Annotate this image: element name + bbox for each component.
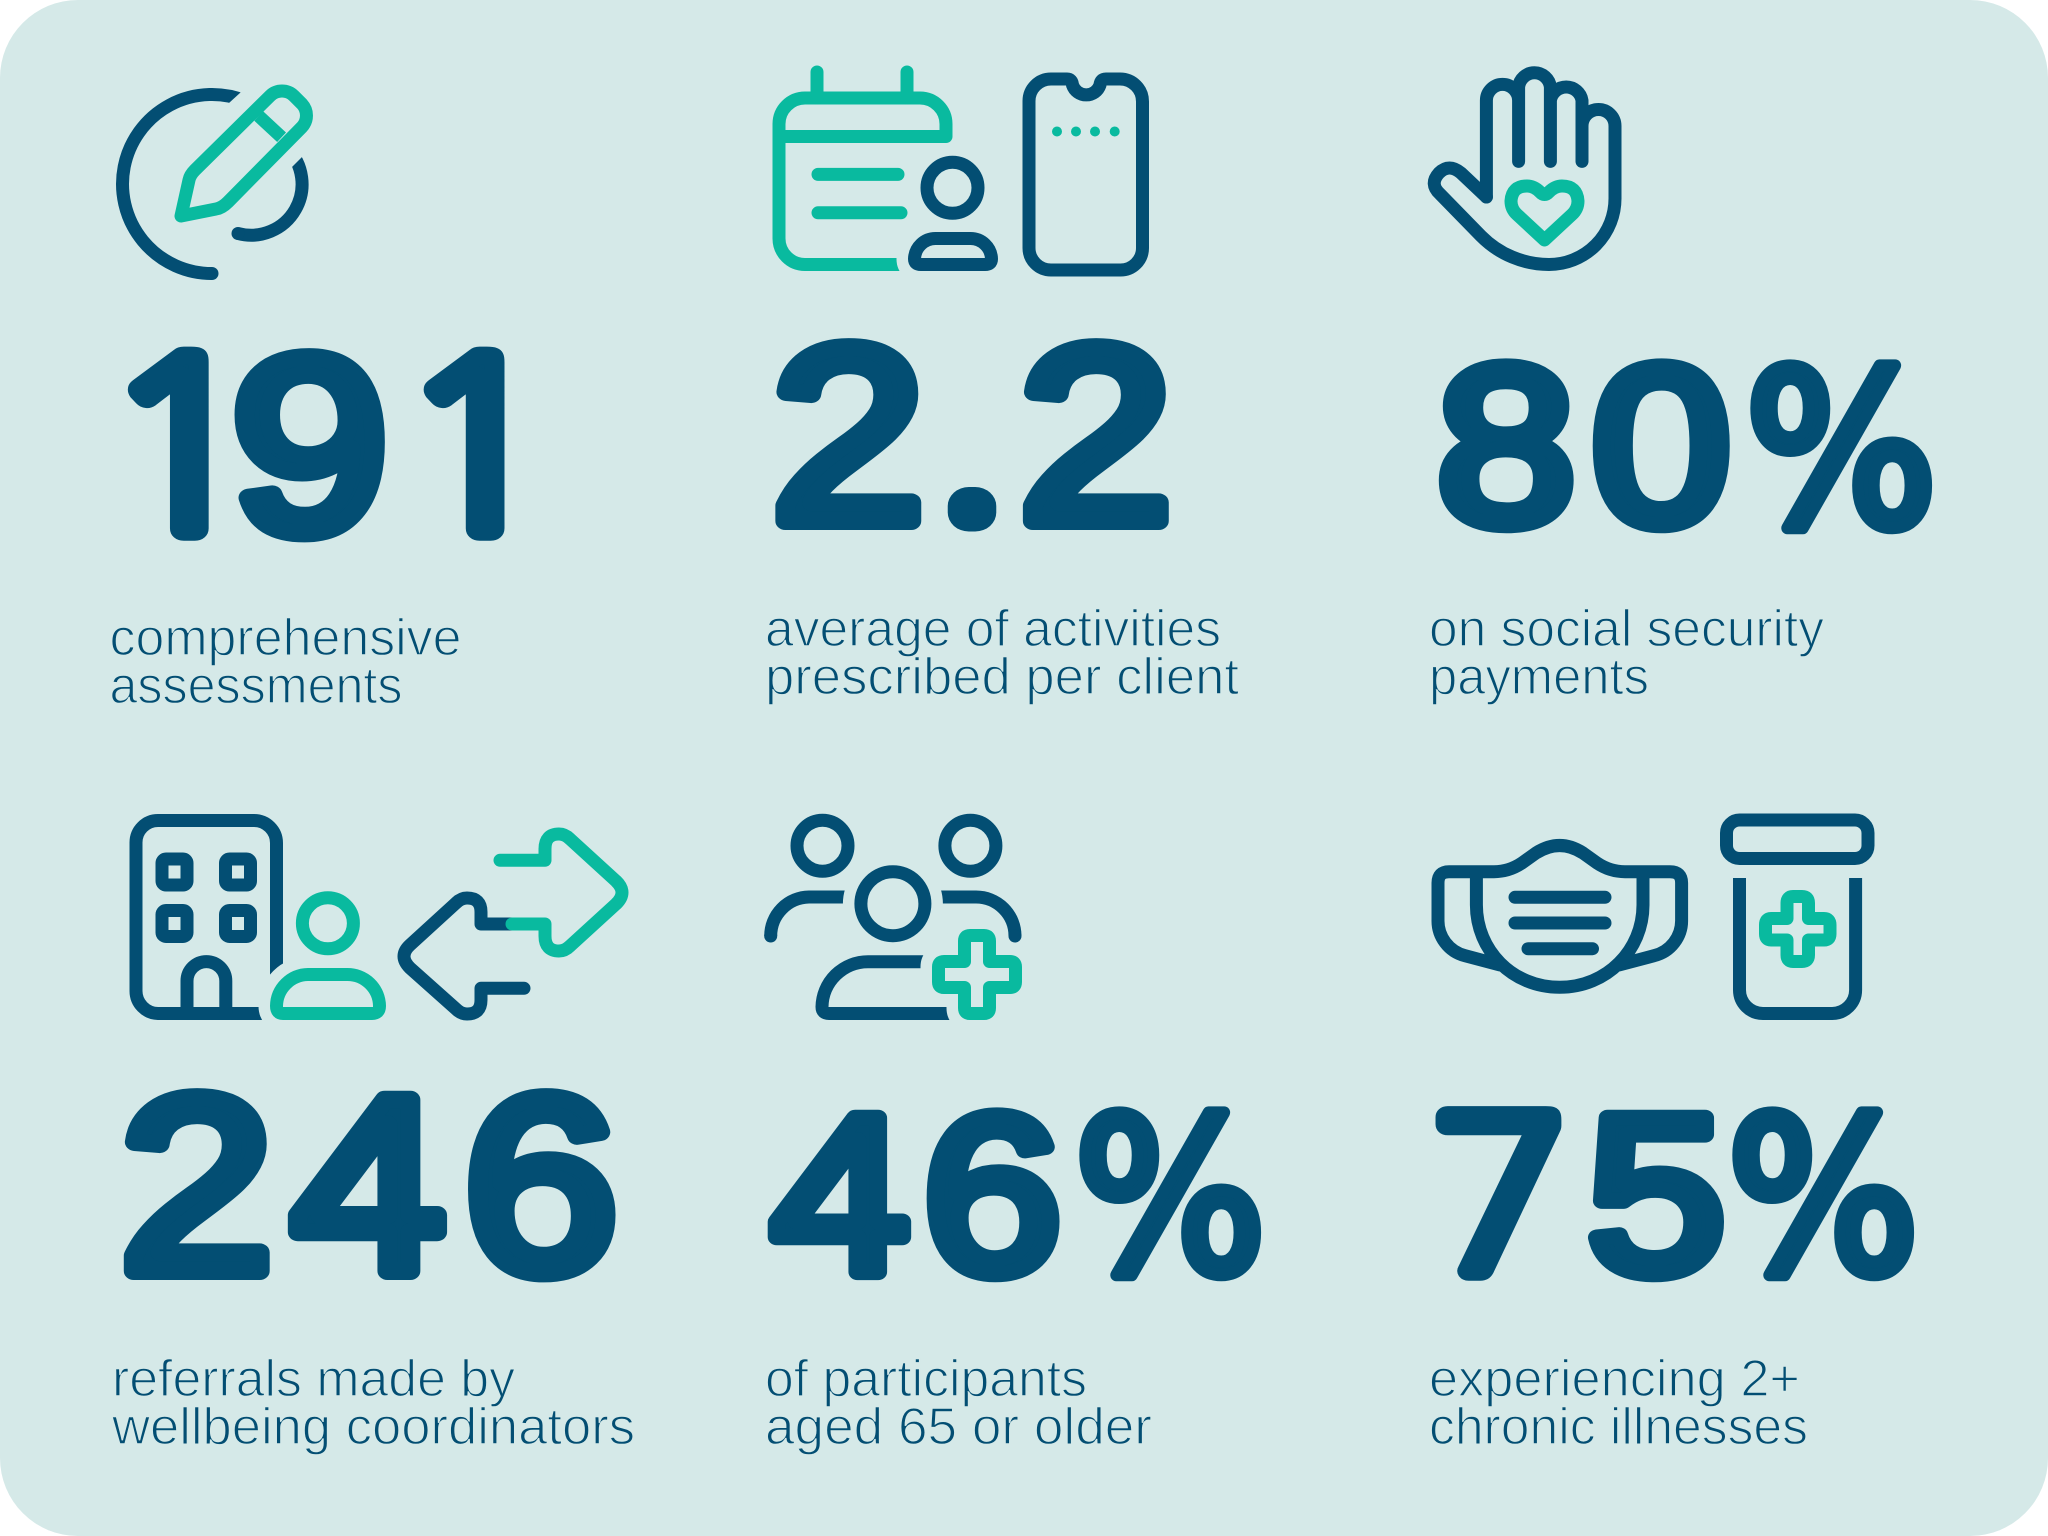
- stat: 191: 1: [396, 329, 558, 566]
- stat: 75%: 7: [1428, 1091, 1571, 1303]
- label: comprehensive assessments: assessments: [110, 657, 402, 715]
- label: comprehensive assessments: comprehensive: [110, 609, 462, 667]
- label: of participants aged 65 or older: aged 65 or older: [765, 1398, 1152, 1456]
- stat: 75%: 5: [1587, 1070, 1725, 1320]
- label: comprehensive assessments: [110, 609, 462, 715]
- stat: 46%: 46: [771, 1070, 1061, 1320]
- label: referrals made by wellbeing coordinators: wellbeing coordinators: [111, 1398, 635, 1456]
- icon: face mask and pill bottle: [1438, 820, 1868, 1014]
- icon: three people with medical cross: [764, 820, 1022, 1014]
- stat: 46%: %: [1074, 1073, 1266, 1323]
- stat: 2.2: 2: [1019, 296, 1173, 574]
- panel: participants aged 65 or older: [764, 820, 1266, 1456]
- label: on social security payments: on social security: [1429, 600, 1824, 658]
- panel: referrals: [111, 820, 635, 1456]
- label: referrals made by wellbeing coordinators: [111, 1350, 635, 1456]
- stat: 80%: [1437, 321, 1937, 576]
- label: average of activities prescribed per client: average of activities: [765, 600, 1221, 658]
- label: experiencing 2+ chronic illnesses: chronic illnesses: [1429, 1398, 1808, 1456]
- stat: 46%: [771, 1070, 1266, 1323]
- label: of participants aged 65 or older: of participants: [765, 1350, 1087, 1408]
- label: experiencing 2+ chronic illnesses: [1429, 1350, 1808, 1456]
- stat: 246: 246: [120, 1046, 618, 1324]
- stat: 191: 1: [100, 329, 262, 566]
- label: average of activities prescribed per client: prescribed per client: [765, 648, 1240, 706]
- stat: 75%: %: [1727, 1073, 1919, 1323]
- label: referrals made by wellbeing coordinators: referrals made by: [112, 1350, 515, 1408]
- label: on social security payments: [1429, 600, 1824, 706]
- stat: 2.2: 2: [771, 296, 925, 574]
- panel: chronic illnesses: [1428, 820, 1919, 1456]
- stat: 2.2: .: [963, 459, 981, 526]
- stat: 191: 9: [232, 306, 388, 584]
- label: on social security payments: payments: [1429, 648, 1649, 706]
- icon: building, person and arrows: [136, 820, 622, 1014]
- label: average of activities prescribed per client: [765, 600, 1240, 706]
- icon: calendar, person and phone: [779, 72, 1142, 270]
- label: of participants aged 65 or older: [765, 1350, 1152, 1456]
- label: experiencing 2+ chronic illnesses: experiencing 2+: [1429, 1350, 1800, 1408]
- panel: activities prescribed: [765, 72, 1240, 706]
- icon: pencil in circle: [123, 88, 310, 280]
- stat: 80%: %: [1745, 326, 1937, 576]
- stat: 80%: 80: [1437, 321, 1730, 571]
- icon: hand with heart: [1434, 73, 1615, 264]
- panel: social security payments: [1429, 73, 1937, 706]
- stat: 75%: [1428, 1070, 1919, 1323]
- panel: comprehensive assessments: [100, 88, 558, 715]
